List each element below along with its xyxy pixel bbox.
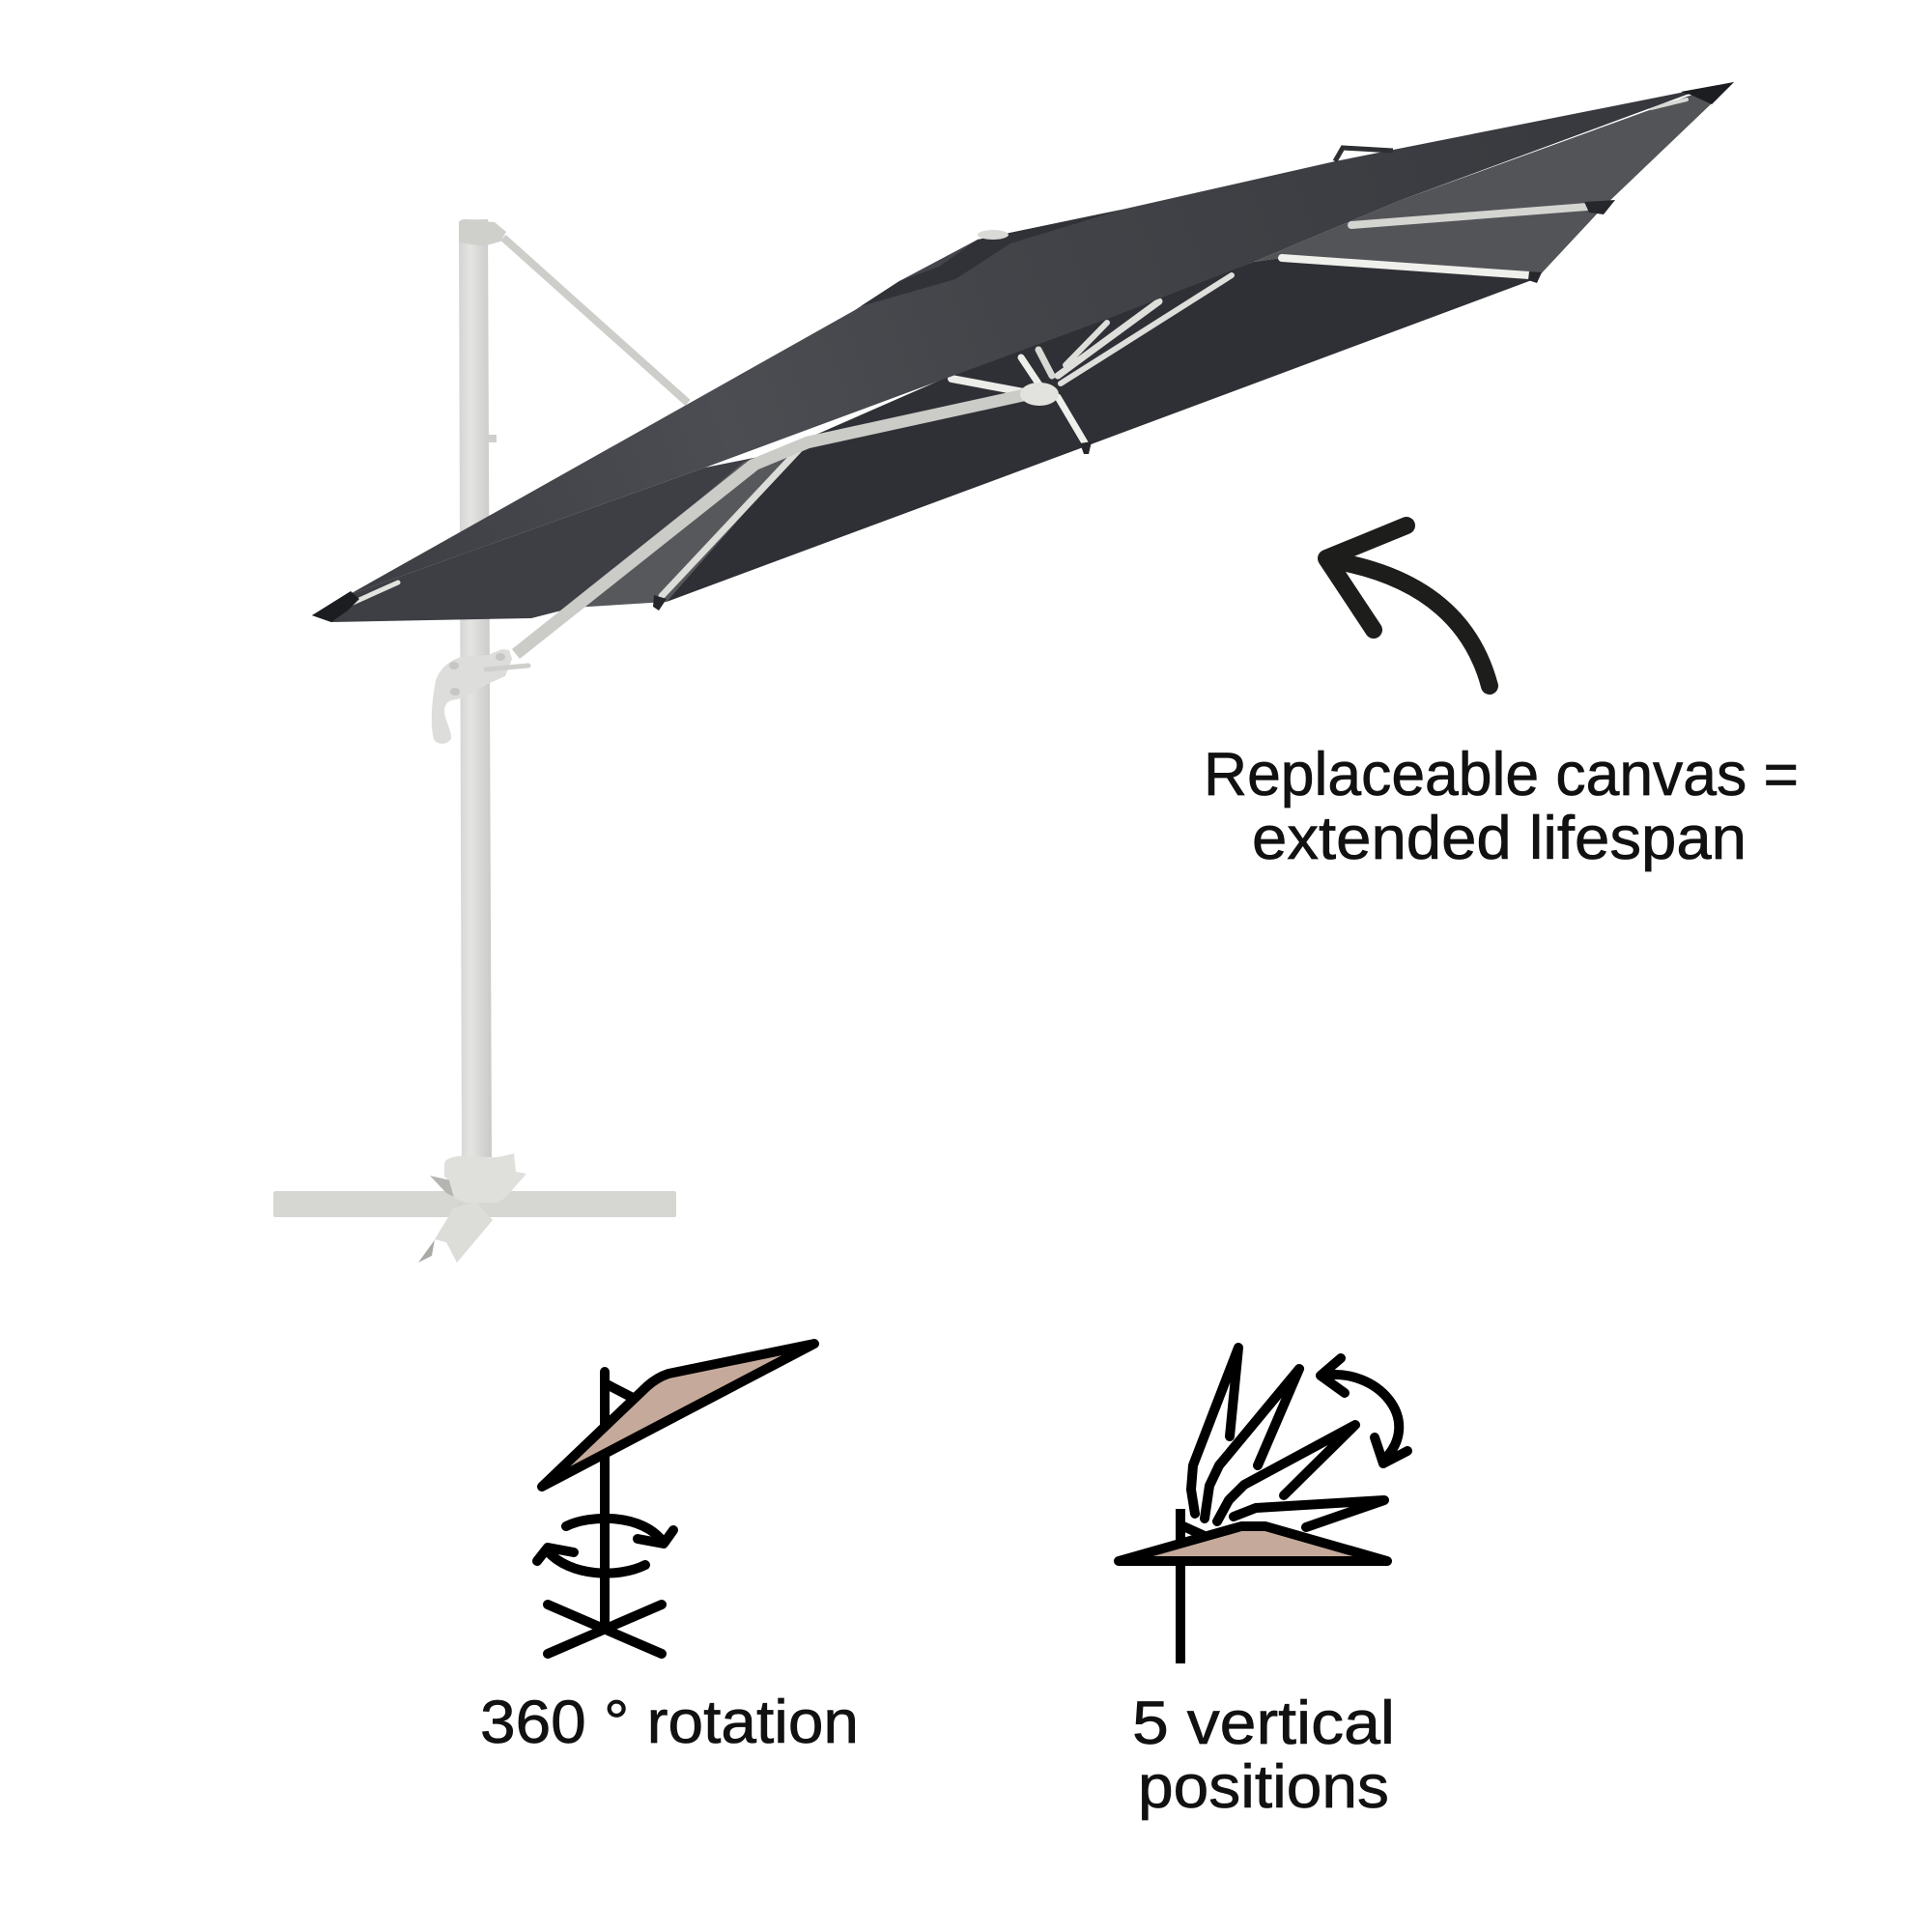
canopy underside left panel: [312, 454, 773, 622]
label: 5 vertical positions: [1132, 1690, 1395, 1821]
callout text: replaceable canvas: Replaceable canvas =: [1204, 741, 1799, 809]
pole cap and peg: [459, 219, 506, 442]
canopy underside dark panel: [667, 258, 1537, 602]
callout text: replaceable canvas: [1204, 741, 1799, 872]
product photo: cantilever parasol: [273, 82, 1734, 1263]
support strut: [503, 238, 688, 403]
rib tips: [653, 200, 1615, 611]
tilt bracket: [432, 649, 512, 744]
label: 360 rotation: 360 ° rotation: [480, 1689, 859, 1756]
icon: 360 rotation: [537, 1344, 814, 1654]
callout arrow: [1326, 526, 1490, 686]
main arm: [512, 389, 1026, 659]
pole: [459, 219, 492, 1157]
bracket bolts: [449, 653, 505, 696]
base front leg slot: [418, 1200, 464, 1263]
canopy strap: [1335, 148, 1393, 161]
canopy ribs: [351, 99, 1687, 604]
label: 5 vertical positions: 5 vertical: [1132, 1690, 1395, 1757]
base cross bar: [273, 1191, 676, 1217]
canopy underside light wedge: [573, 435, 821, 608]
label: 5 vertical positions: positions: [1138, 1753, 1389, 1821]
tilt lever: [486, 666, 528, 669]
base collar: [444, 1153, 526, 1203]
base clip: [430, 1176, 456, 1198]
callout text: replaceable canvas: extended lifespan: [1252, 805, 1747, 872]
canopy tip corners: [312, 82, 1734, 622]
canopy top panel: [312, 82, 1734, 615]
icon: 5 vertical positions: [1119, 1348, 1407, 1663]
vent flap: [861, 210, 1122, 306]
hub: [1020, 383, 1059, 406]
base front leg: [435, 1202, 493, 1263]
canopy underside right panel: [1254, 82, 1734, 278]
vent cap: [978, 230, 1009, 240]
